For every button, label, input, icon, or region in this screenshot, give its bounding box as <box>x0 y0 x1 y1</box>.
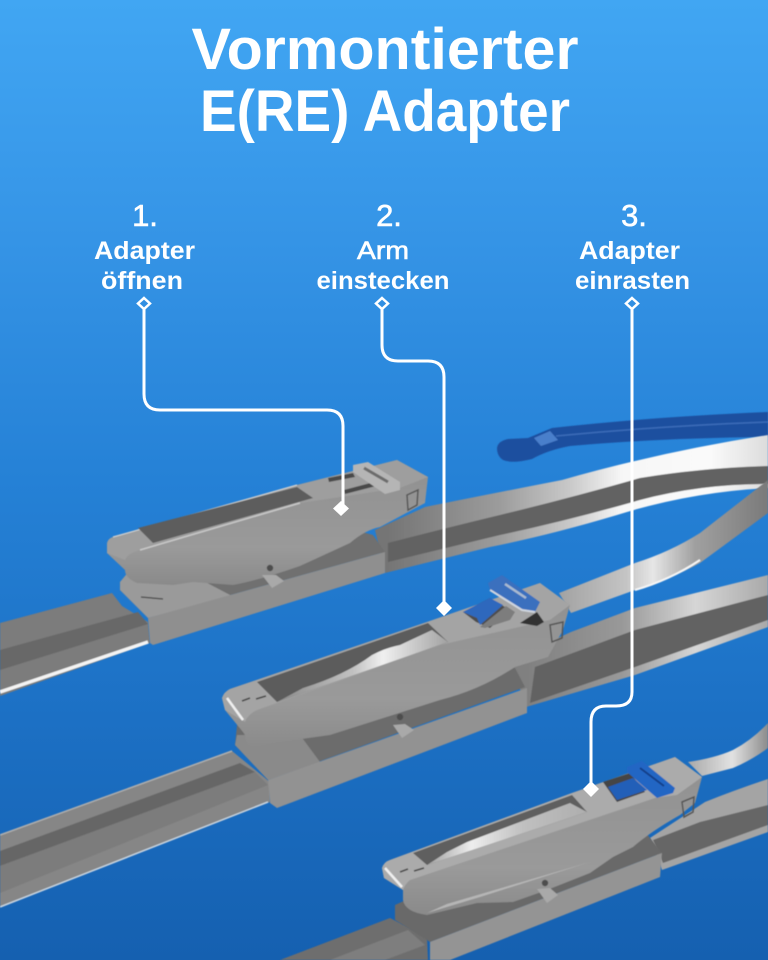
shell top face <box>382 757 702 890</box>
arm 3 <box>688 723 768 776</box>
blue latch <box>488 575 540 612</box>
slot cut <box>463 598 510 628</box>
start marker <box>376 298 388 309</box>
dark cutout <box>520 612 544 626</box>
step 3 label <box>575 198 690 295</box>
pivot and pin <box>397 714 403 720</box>
step 1 label <box>94 198 195 295</box>
base underside <box>395 825 662 942</box>
adapter 1, open <box>107 460 428 645</box>
window <box>413 795 587 865</box>
title <box>192 17 578 144</box>
window <box>138 487 313 543</box>
side emblem <box>682 797 694 817</box>
shell body <box>107 460 428 585</box>
step 1 label: öffnen <box>101 267 183 295</box>
adapter 3, locked <box>382 757 702 960</box>
arm 2 <box>559 480 768 613</box>
pivot and pin <box>267 565 273 571</box>
lower highlight <box>427 862 590 913</box>
end marks <box>242 696 266 701</box>
side emblem <box>407 490 418 510</box>
shell body <box>382 757 702 915</box>
wiper blade 2, left section <box>0 751 270 907</box>
end marker <box>583 781 599 797</box>
title: E(RE) Adapter <box>200 79 570 144</box>
step 2 label: Arm <box>357 237 409 265</box>
metal rim <box>227 698 243 720</box>
title: Vormontierter <box>192 17 578 82</box>
step 3 label: einrasten <box>575 267 690 295</box>
step 2 label <box>316 198 450 295</box>
end marker <box>436 600 452 616</box>
leader line 1 <box>138 298 349 516</box>
glare plate in window <box>277 630 448 702</box>
side emblem <box>550 622 563 642</box>
slot cut <box>603 773 645 802</box>
blue tongue <box>463 598 503 625</box>
step 1 label: Adapter <box>94 237 195 265</box>
shell top face <box>107 460 428 560</box>
blue latch <box>627 761 675 798</box>
step 2 label: 2. <box>376 198 402 233</box>
leader line 3 <box>583 298 638 797</box>
latch <box>353 462 400 494</box>
base front <box>148 552 385 645</box>
steel hinge <box>480 606 515 628</box>
leader line 2 <box>376 298 452 616</box>
pivot and pin <box>542 880 548 886</box>
slots <box>328 473 380 494</box>
adapter 2, arm inserted <box>222 575 570 808</box>
metal rim <box>385 868 402 887</box>
wiper blade 2, right section <box>510 575 768 707</box>
end marks <box>400 868 424 872</box>
start marker <box>138 298 150 309</box>
step 1 label: 1. <box>132 198 158 233</box>
step 3 label: 3. <box>621 198 647 233</box>
base front <box>268 688 527 808</box>
step 3 label: Adapter <box>579 237 680 265</box>
shell top face <box>222 583 570 722</box>
base underside <box>235 660 525 780</box>
glare plate in window <box>427 803 587 865</box>
end marker <box>333 501 349 516</box>
window <box>257 623 448 702</box>
wiper blade 3, right section <box>650 779 768 870</box>
blue tongue <box>608 778 647 800</box>
base front <box>430 853 662 960</box>
step 2 label: einstecken <box>316 267 450 295</box>
base underside <box>120 530 385 618</box>
wiper blade 1, left section <box>0 593 150 696</box>
wiper blade 3, left section <box>280 918 428 960</box>
shell body <box>222 583 570 748</box>
wiper blade 1, right section <box>375 435 768 573</box>
blue wiper arm, top right <box>497 412 768 462</box>
start marker <box>626 298 638 309</box>
